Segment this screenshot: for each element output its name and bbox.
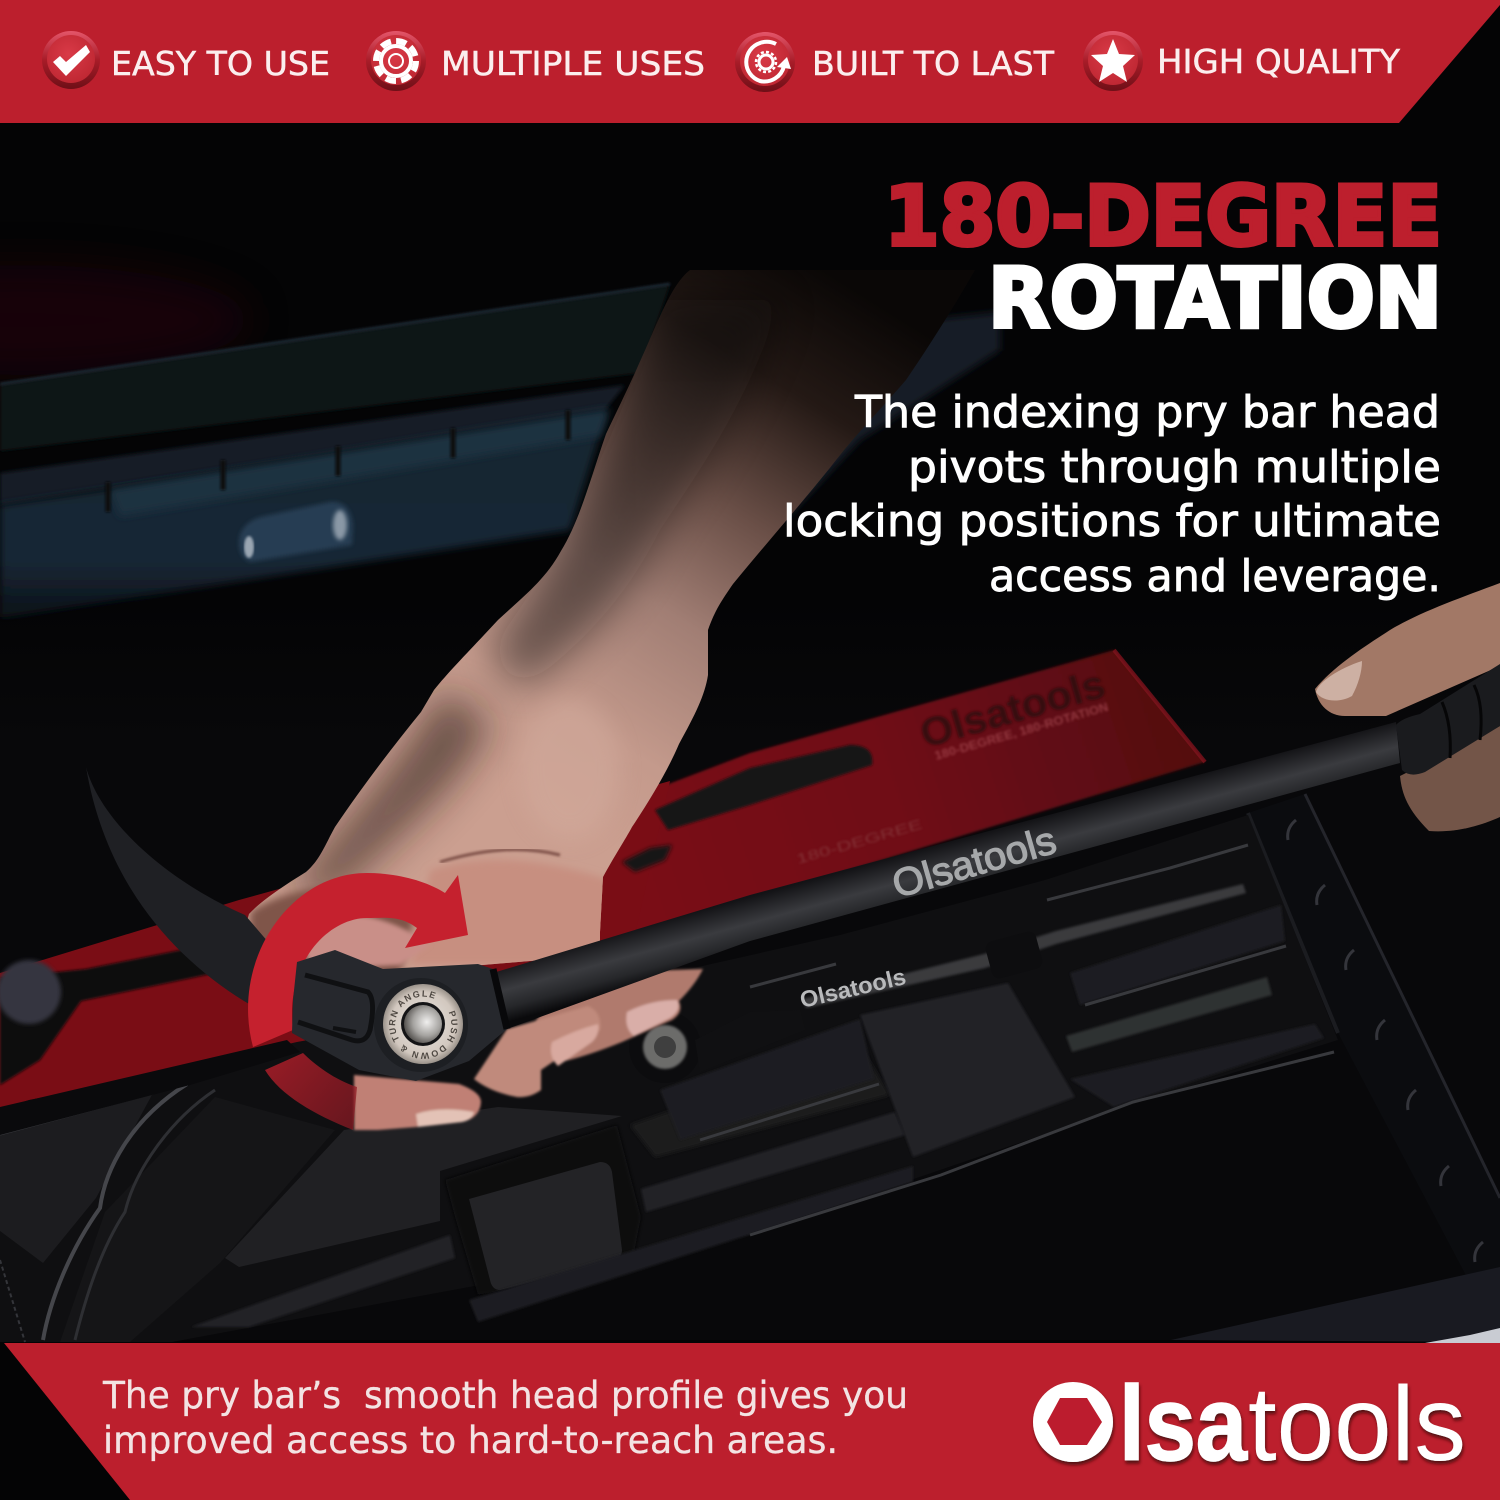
arrow: faded lower arc xyxy=(265,1053,357,1130)
palm highlight xyxy=(544,712,605,784)
brand logo: tools xyxy=(1248,1365,1466,1483)
badge: built to last xyxy=(735,32,1055,92)
badge: multiple uses: MULTIPLE USES xyxy=(441,44,705,83)
thumb web xyxy=(410,860,610,965)
brand logo: lsa xyxy=(1119,1365,1248,1483)
bottom caption: improved access to hard-to-reach areas. xyxy=(103,1419,838,1462)
arrow: main arc xyxy=(248,873,468,1047)
fingers below the bar xyxy=(354,969,703,1130)
description text: pivots through multiple xyxy=(908,442,1441,493)
badge: high quality xyxy=(1083,31,1401,91)
headline xyxy=(884,168,1442,347)
description text: The indexing pry bar head xyxy=(854,387,1440,438)
description text: locking positions for ultimate xyxy=(783,496,1441,547)
headline: 180-DEGREE xyxy=(884,168,1442,265)
rotation arrow xyxy=(248,873,468,1130)
red product box: 180-DEGREE xyxy=(794,816,924,867)
icon: rotating gear xyxy=(735,32,795,92)
spare bar logo: Olsatools xyxy=(797,963,908,1013)
foam insert xyxy=(0,815,1338,1342)
badge: multiple uses xyxy=(366,31,705,91)
pry bar shaft with logo xyxy=(493,664,1500,1029)
badge: easy to use xyxy=(42,31,330,89)
arm hair shading xyxy=(490,300,780,690)
box slot xyxy=(655,745,872,830)
shaft logo: Olsatools xyxy=(888,819,1061,907)
lid latch xyxy=(239,502,353,562)
pry bar claw xyxy=(86,767,285,1025)
description text xyxy=(783,387,1441,602)
icon: star xyxy=(1083,31,1143,91)
right hand holding handle xyxy=(1315,583,1500,831)
case edge behind head xyxy=(0,1040,300,1135)
spare bar in foam xyxy=(803,884,1246,1008)
forearm and hand xyxy=(248,270,948,969)
rubber grip xyxy=(1396,664,1500,775)
headline: ROTATION xyxy=(988,250,1442,347)
icon: gear xyxy=(366,31,426,91)
badge: built to last: BUILT TO LAST xyxy=(812,44,1055,83)
badge: easy to use: EASY TO USE xyxy=(111,44,330,83)
top banner xyxy=(0,0,1500,123)
spare bar bolt xyxy=(629,1011,701,1083)
red product box xyxy=(0,650,1205,1110)
pry bar head with indexing button xyxy=(292,950,510,1081)
brand logo xyxy=(1033,1365,1466,1483)
back of hand shadow xyxy=(290,690,490,900)
bottom caption xyxy=(102,1374,908,1462)
red product box: 180-DEGREE, 180-ROTATION xyxy=(933,700,1110,763)
foam tab xyxy=(860,983,1075,1157)
foam highlight lines xyxy=(700,845,1334,1235)
indexing button disk: PUSH DOWN & TURN ANGLE xyxy=(388,990,458,1059)
badge: high quality: HIGH QUALITY xyxy=(1157,42,1401,81)
brand logo: O xyxy=(1040,1369,1106,1481)
description text: access and leverage. xyxy=(989,551,1441,602)
indexing button disk xyxy=(374,978,468,1072)
foam finger cut-out, left xyxy=(445,1125,641,1295)
bottom caption: The pry bar’s smooth head profile gives you xyxy=(102,1374,908,1417)
icon: check xyxy=(42,31,100,89)
box logo text: Olsatools xyxy=(915,662,1110,757)
case lid, blue-grey panel xyxy=(0,284,1000,618)
case right wall with hooks xyxy=(1248,794,1500,1340)
bottom banner xyxy=(4,1343,1500,1500)
